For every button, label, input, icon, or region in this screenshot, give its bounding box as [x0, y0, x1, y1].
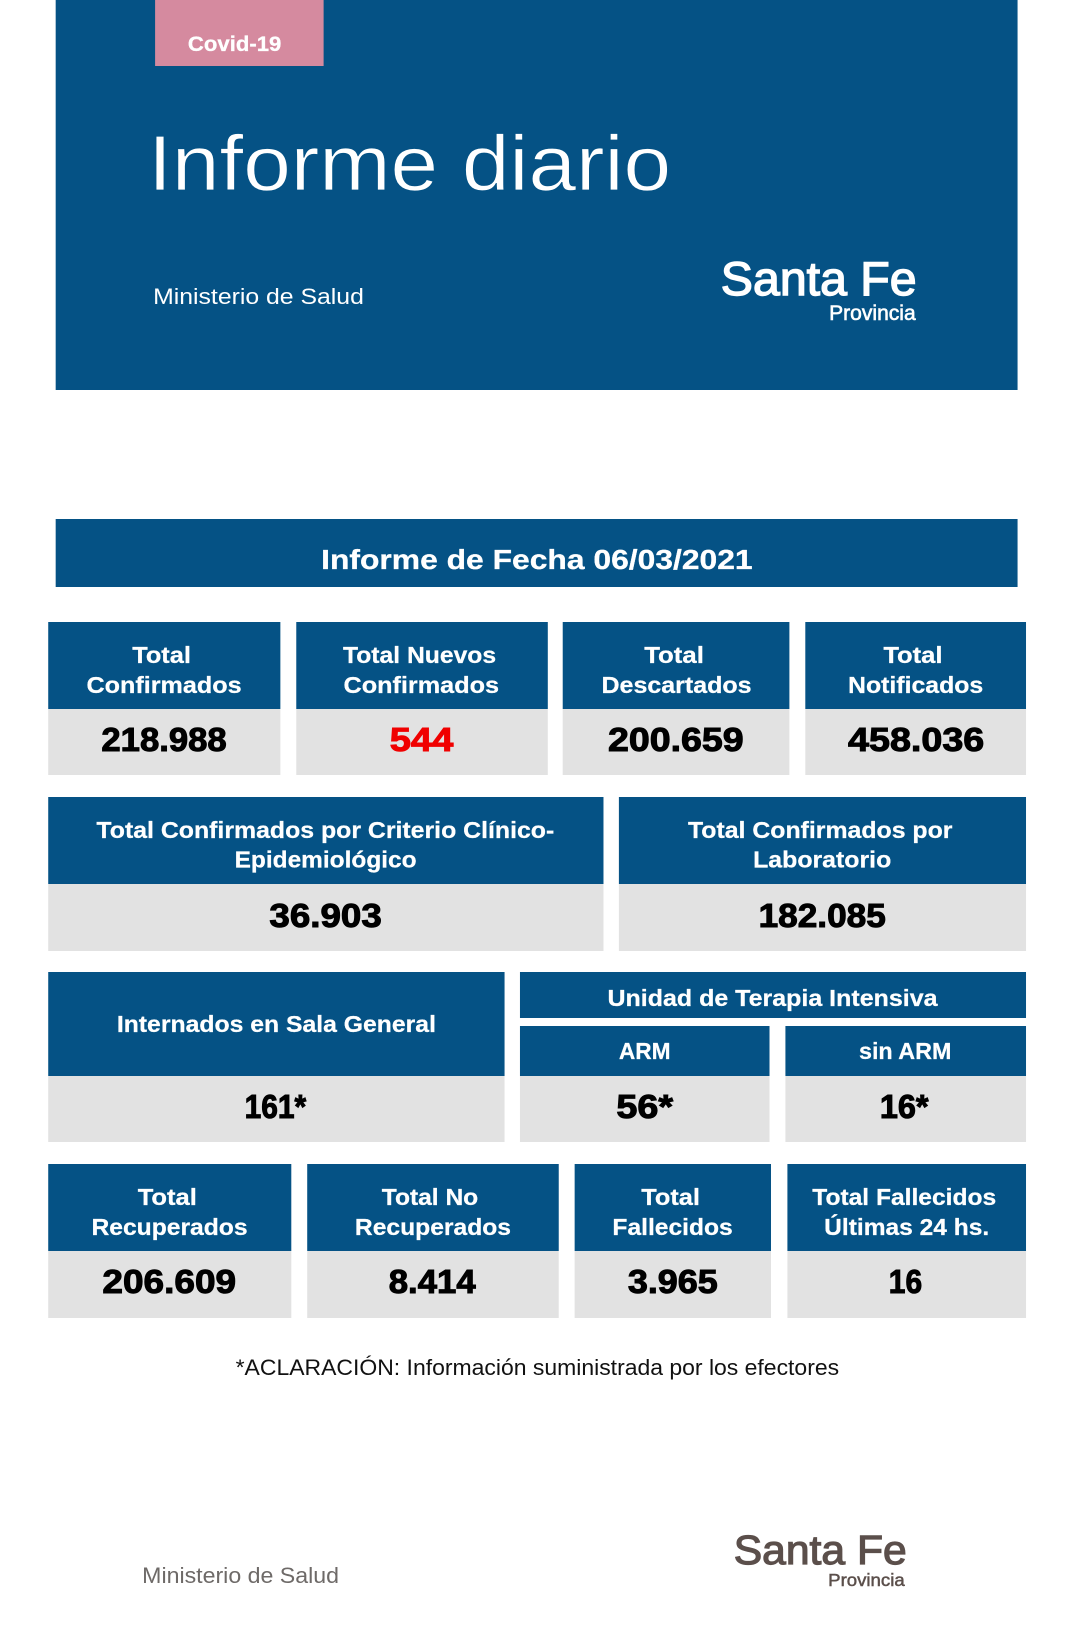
- card: Internados en Sala General: Internados en Sala General: [117, 1011, 436, 1037]
- card: Total Fallecidos Últimas 24 hs.: 16: [889, 1263, 922, 1300]
- tag: Covid-19: Covid-19: [188, 33, 281, 56]
- logo: Santa Fe Provincia: Provincia: [829, 302, 916, 325]
- card: Total Fallecidos Últimas 24 hs.: Total Fallecidos: [812, 1184, 996, 1210]
- date banner: Informe de Fecha 06/03/2021: [321, 544, 753, 575]
- card: Total Nuevos Confirmados: 544: [390, 721, 454, 758]
- card: sin ARM: [785, 1026, 1026, 1142]
- card: sin ARM: sin ARM: [859, 1038, 951, 1064]
- footer logo: Santa Fe Provincia: Santa Fe: [734, 1527, 907, 1573]
- card: Total Fallecidos: 3.965: [628, 1263, 718, 1300]
- date banner: [56, 519, 1018, 587]
- tag: Covid-19: [155, 0, 324, 66]
- card: Total Recuperados: [48, 1164, 291, 1318]
- card: Confirmados por Criterio Clínico-Epidemiológico: 36.903: [269, 897, 382, 934]
- card: Total Nuevos Confirmados: [296, 622, 548, 775]
- card: Total Confirmados: 218.988: [101, 721, 227, 758]
- card: Total Notificados: 458.036: [848, 721, 984, 758]
- card: Total No Recuperados: Total No: [382, 1184, 478, 1210]
- card: Confirmados por Laboratorio: Total Confirmados por: [688, 817, 953, 843]
- card: Total No Recuperados: [307, 1164, 559, 1318]
- card: Total No Recuperados: 8.414: [389, 1263, 476, 1300]
- card: Confirmados por Laboratorio: 182.085: [759, 897, 886, 934]
- footer logo: Santa Fe Provincia: [734, 1527, 907, 1590]
- card: Total Confirmados: Confirmados: [86, 672, 242, 698]
- card: ARM: [520, 1026, 770, 1142]
- card: Total Descartados: 200.659: [608, 721, 744, 758]
- card: Total Confirmados: [48, 622, 280, 775]
- ministry text: Ministerio de Salud: [153, 284, 364, 309]
- card: Confirmados por Laboratorio: Laboratorio: [753, 846, 891, 873]
- header panel: [56, 0, 1018, 390]
- header: Unidad de Terapia Intensiva: Unidad de Terapia Intensiva: [607, 985, 938, 1011]
- card: Total Nuevos Confirmados: Total Nuevos: [343, 642, 496, 668]
- card: Internados en Sala General: [48, 972, 505, 1142]
- card: Total Notificados: Notificados: [848, 672, 983, 698]
- card: Confirmados por Criterio Clínico-Epidemiológico: Epidemiológico: [235, 846, 417, 873]
- header: Unidad de Terapia Intensiva: [520, 972, 1026, 1018]
- card: Total No Recuperados: Recuperados: [355, 1214, 511, 1240]
- card: Confirmados por Criterio Clínico-Epidemiológico: Total Confirmados por Criterio Clínico-: [96, 817, 554, 843]
- footer ministry text: Ministerio de Salud: [142, 1563, 339, 1588]
- logo: Santa Fe Provincia: [721, 253, 917, 325]
- card: Total Descartados: [563, 622, 789, 775]
- card: ARM: 56*: [616, 1088, 673, 1125]
- card: Confirmados por Laboratorio: [619, 797, 1026, 951]
- card: Total Descartados: Total: [644, 642, 704, 668]
- card: Total Notificados: Total: [883, 642, 943, 668]
- card: Total Fallecidos Últimas 24 hs.: [787, 1164, 1026, 1318]
- card: ARM: ARM: [619, 1038, 671, 1064]
- card: Total Notificados: [805, 622, 1026, 775]
- card: Total Fallecidos: [575, 1164, 771, 1318]
- logo: Santa Fe Provincia: Santa Fe: [721, 253, 917, 305]
- card: Total Recuperados: Total: [138, 1184, 197, 1210]
- card: Total Descartados: Descartados: [601, 672, 752, 698]
- card: Total Fallecidos: Total: [641, 1184, 700, 1210]
- card: Total Fallecidos Últimas 24 hs.: Últimas 24 hs.: [824, 1214, 989, 1240]
- footer logo: Santa Fe Provincia: Provincia: [828, 1570, 905, 1590]
- card: Confirmados por Criterio Clínico-Epidemiológico: [48, 797, 603, 951]
- footnote: *ACLARACIÓN: Información suministrada por los efectores: [236, 1355, 839, 1380]
- card: sin ARM: 16*: [880, 1088, 929, 1125]
- card: Total Recuperados: Recuperados: [91, 1214, 248, 1240]
- title: Informe diario: [148, 121, 671, 207]
- card: Total Fallecidos: Fallecidos: [612, 1214, 733, 1240]
- card: Total Confirmados: Total: [132, 642, 191, 668]
- card: Internados en Sala General: 161*: [245, 1088, 306, 1125]
- card: Total Recuperados: 206.609: [102, 1263, 236, 1300]
- card: Total Nuevos Confirmados: Confirmados: [343, 672, 499, 698]
